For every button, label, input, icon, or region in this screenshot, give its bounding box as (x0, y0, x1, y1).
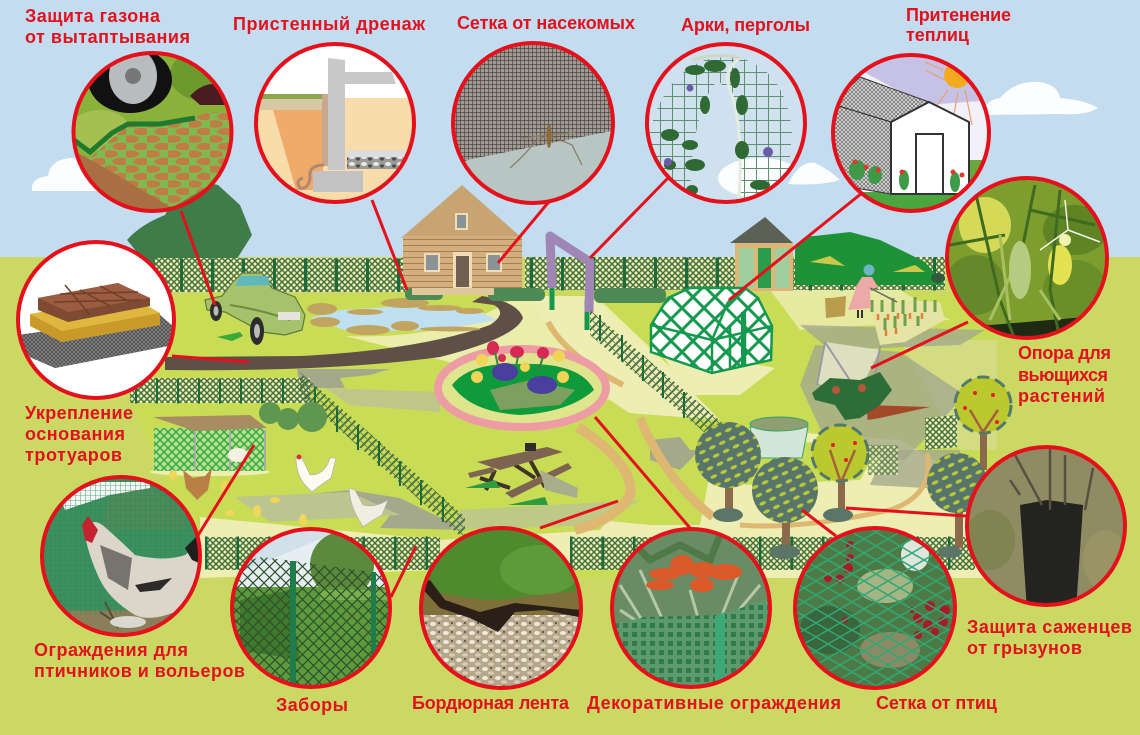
shrubs along house (405, 288, 666, 303)
label: greenhouse: Притенение (906, 5, 1011, 25)
label: border tape: Бордюрная лента (412, 693, 570, 713)
callout: greenhouse shading (830, 52, 994, 216)
label: poultry fencing: Ограждения для (34, 640, 188, 660)
label: climbing plants: растений (1018, 386, 1105, 406)
tan garden paths (548, 322, 928, 530)
lawn patch in front (590, 410, 720, 525)
label: sidewalk base: Укрепление (25, 403, 133, 423)
lawn area (130, 295, 997, 578)
chicken coop (150, 415, 270, 476)
callout: arches and pergolas (645, 42, 809, 210)
picnic table (465, 443, 578, 505)
pale path areas (200, 290, 990, 578)
label: lawn protection: Защита газона (25, 6, 161, 26)
callout: lawn protection (70, 47, 236, 216)
lawn ground (0, 257, 1140, 735)
callout: poultry fencing (40, 475, 204, 640)
label: sidewalk base: тротуаров (25, 445, 122, 465)
label: seedling protection: от грызунов (967, 638, 1082, 658)
label: lawn protection: от вытаптывания (25, 27, 190, 47)
road (165, 296, 523, 370)
big tree (127, 178, 252, 292)
gazebo (730, 217, 793, 291)
slope fence right (590, 310, 725, 450)
garden scene (127, 178, 1011, 578)
label: greenhouse (906, 5, 1011, 45)
callout: fences (230, 527, 392, 689)
label: arches: Арки, перголы (681, 15, 810, 35)
garden arch (550, 236, 590, 330)
slope fence left (130, 372, 465, 540)
green car (205, 273, 305, 345)
shrubs near coop (259, 402, 327, 432)
hedge behind gazebo (795, 232, 945, 285)
pond (307, 298, 497, 335)
net cylinder (750, 417, 808, 458)
label: poultry fencing: птичников и вольеров (34, 661, 245, 681)
hens (169, 454, 388, 527)
callout: sidewalk base (15, 240, 177, 402)
label: greenhouse: теплиц (906, 25, 969, 45)
label: seedling protection (967, 617, 1132, 658)
callout: bird netting (794, 527, 956, 689)
orchard trees (695, 377, 1011, 559)
front fence (205, 415, 975, 570)
vegetable bed (870, 297, 945, 345)
label: sidewalk base: основания (25, 424, 125, 444)
back fence (155, 257, 945, 292)
callout: insect mesh (450, 40, 618, 208)
leader lines (172, 178, 968, 597)
label: decorative fencing: Декоративные ограждения (587, 693, 841, 713)
grey shadows (297, 325, 985, 530)
callout: decorative fencing (610, 527, 772, 689)
callout: seedling protection (965, 445, 1127, 610)
gardener (825, 264, 945, 318)
sky background (0, 0, 1140, 262)
label: climbing plants: вьющихся (1018, 365, 1108, 385)
clouds (32, 82, 1098, 191)
callout: wall drainage (254, 42, 419, 206)
climbing plant frame (812, 342, 930, 420)
label: wall drainage: Пристенный дренаж (233, 14, 425, 34)
callout: border tape (419, 526, 583, 690)
label: insect mesh: Сетка от насекомых (457, 13, 635, 33)
label: climbing plants: Опора для (1018, 343, 1111, 363)
label: sidewalk base (25, 403, 133, 465)
label: fences: Заборы (276, 695, 348, 715)
log house (401, 185, 522, 295)
label: climbing plants (1018, 343, 1111, 406)
label: lawn protection (25, 6, 190, 47)
greenhouse (651, 288, 772, 373)
callout: support for climbing plants (945, 176, 1109, 340)
label: poultry fencing (34, 640, 245, 681)
flower bed (438, 341, 606, 427)
label: bird netting: Сетка от птиц (876, 693, 997, 713)
label: seedling protection: Защита саженцев (967, 617, 1132, 637)
